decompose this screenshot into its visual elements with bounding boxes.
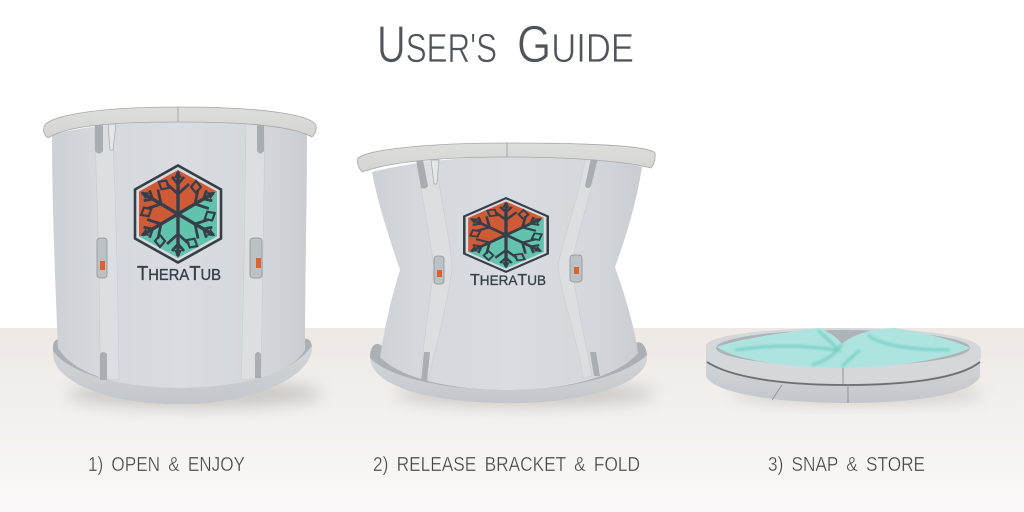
- tub 3 upper ring: [706, 328, 981, 384]
- tub 3 seams and clip: [772, 368, 848, 403]
- tub 1 body: [52, 122, 307, 388]
- tub 1 rim seam: [177, 107, 179, 122]
- tub 2 right buckle: [570, 255, 582, 282]
- floor band: [0, 328, 1024, 512]
- tub 3 lining folds: [735, 330, 950, 367]
- tub 2 body: [372, 157, 642, 390]
- tub 3 teal lining: [717, 328, 970, 368]
- step 2 label: 2) RELEASE BRACKET & FOLD: [373, 454, 640, 476]
- step 3 label: 3) SNAP & STORE: [768, 454, 925, 476]
- title: GUIDE: [517, 16, 634, 74]
- tub 2 left buckle: [434, 256, 444, 284]
- tub 1 zip tab: [108, 124, 116, 150]
- white backdrop: [0, 0, 1024, 328]
- title: USER'S: [377, 16, 497, 74]
- tub 1 base tray: [53, 339, 312, 404]
- tub 1 orange tabs: [100, 258, 261, 270]
- tub 2 left strap: [417, 160, 452, 380]
- tub 1 lower rods: [100, 352, 261, 380]
- title: [377, 16, 634, 74]
- tub 2 right strap: [558, 160, 598, 378]
- tub 2: folding: [358, 143, 655, 406]
- tub 3: stored: [706, 328, 983, 403]
- tub 1 upper rods: [95, 124, 264, 154]
- tub 3 lower ring: [706, 356, 980, 403]
- tub 1 right buckle: [250, 238, 262, 278]
- tub 1 wordmark: THERATUB: [137, 263, 221, 285]
- tub 3 shadow: [733, 385, 983, 403]
- tub 1 buckles: [97, 238, 107, 278]
- tub 2 base tray: [370, 342, 647, 403]
- tub 1 logo: [129, 166, 227, 262]
- tub 2 lower rods: [421, 352, 600, 381]
- tub 1: open: [44, 107, 323, 408]
- tub 1 right strap: [241, 124, 265, 380]
- tub 2 zip tab: [431, 160, 439, 184]
- tub 2 shadow: [395, 382, 655, 406]
- tub 1 shadow: [67, 380, 323, 408]
- tub 3 ring gap: [707, 362, 980, 385]
- tub 2 logo: [459, 198, 553, 272]
- tub 2 wordmark: THERATUB: [470, 272, 546, 289]
- tub 2 rim: [358, 143, 655, 172]
- tub 2 orange tabs: [437, 267, 579, 277]
- step labels: [88, 454, 925, 476]
- tub 2 rim seam: [506, 143, 508, 157]
- step 1 label: 1) OPEN & ENJOY: [88, 454, 245, 476]
- tub 1 left strap: [94, 124, 119, 380]
- tub 2 base ring: [370, 355, 647, 403]
- tub 3 ring inner wall: [716, 330, 970, 366]
- tub 1 rim: [44, 107, 316, 138]
- tub 1 base ring: [53, 346, 312, 404]
- tub 2 upper rods: [416, 158, 598, 189]
